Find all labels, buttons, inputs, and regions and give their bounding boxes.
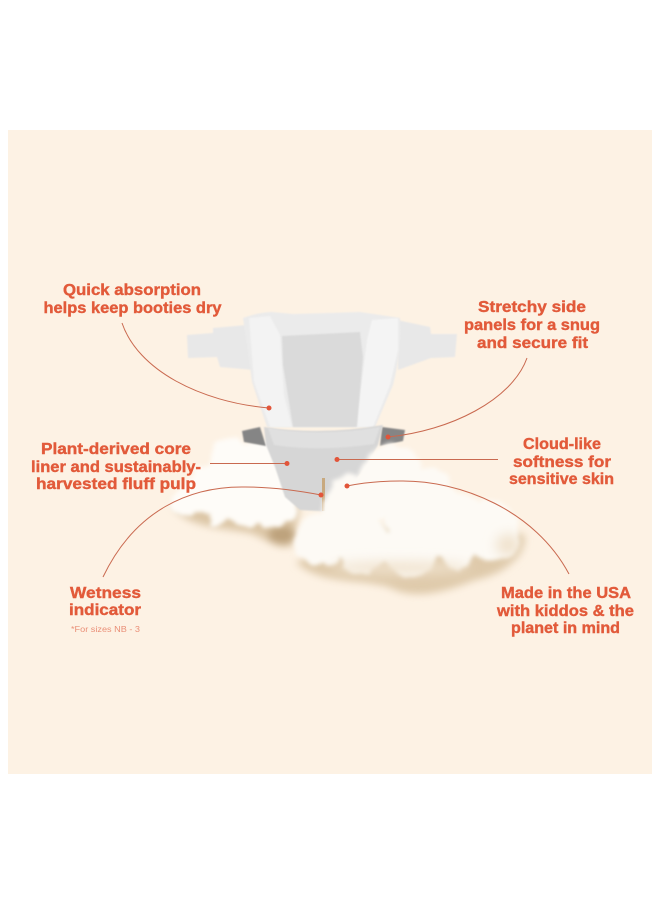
diaper: waistband (268, 427, 380, 448)
callout: stretchy side panels: Stretchy side (478, 299, 586, 316)
callout: plant-derived core: Plant-derived core (41, 441, 191, 458)
callout: made in the USA (496, 585, 634, 637)
callout: made in the USA: Made in the USA (501, 585, 631, 602)
leader: stretchy side panels (386, 358, 527, 440)
callout: made in the USA: with kiddos & the (496, 603, 634, 620)
panel: cream background (8, 130, 652, 774)
leader: plant-derived core (210, 461, 290, 466)
diaper: left cuff (249, 316, 292, 427)
cloud: upper right puff behind diaper (348, 452, 418, 519)
cloud: left puff behind diaper (172, 438, 300, 547)
diaper: left wing and tab (187, 325, 254, 370)
callout: cloud-like softness: Cloud-like (523, 436, 601, 453)
callout: wetness indicator: Wetness (70, 585, 141, 602)
cloud: large right puff (296, 446, 525, 594)
callout: wetness indicator: indicator (69, 602, 141, 619)
diaper: front panel (264, 425, 383, 512)
callout: plant-derived core: liner and sustainably- (31, 459, 201, 476)
diaper: wetness indicator strip (322, 478, 325, 511)
callout: stretchy side panels: panels for a snug (464, 317, 600, 334)
callout: cloud-like softness: softness for (513, 454, 611, 471)
callout: wetness indicator (69, 585, 141, 634)
callout: stretchy side panels: and secure fit (477, 335, 589, 352)
callout: quick absorption: Quick absorption (63, 282, 201, 299)
diaper: inner liner body (243, 312, 400, 427)
diaper (187, 312, 457, 512)
callout: stretchy side panels (464, 299, 600, 352)
leader: made in the USA (344, 481, 569, 574)
callout: cloud-like softness: sensitive skin (509, 471, 614, 488)
callout: made in the USA: planet in mind (511, 620, 620, 637)
diaper: right cuff (355, 318, 398, 427)
leader: wetness indicator (103, 487, 324, 577)
diaper: right side tab (380, 427, 405, 446)
diaper: absorbent core (282, 332, 363, 427)
callout: plant-derived core: harvested fluff pulp (36, 476, 196, 493)
callout: quick absorption: helps keep booties dry (44, 300, 222, 317)
diaper: right wing and tab (397, 320, 457, 370)
diaper: left side tab (242, 427, 266, 446)
leader: cloud-like softness (334, 457, 498, 462)
callout: cloud-like softness (509, 436, 614, 488)
callout: quick absorption (44, 282, 222, 317)
leader: quick absorption (122, 323, 272, 410)
footnote: sizes: *For sizes NB - 3 (71, 625, 141, 634)
callout: plant-derived core (31, 441, 201, 493)
